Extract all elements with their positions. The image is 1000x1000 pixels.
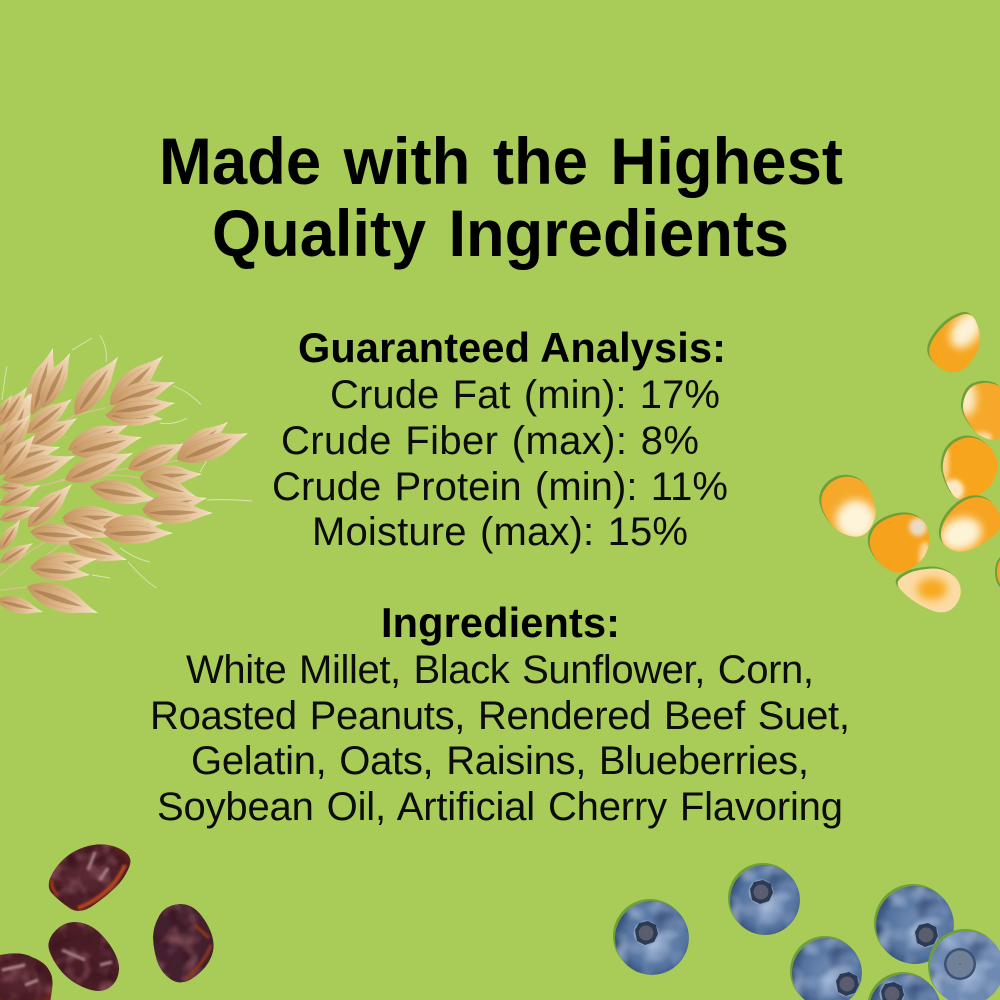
blueberry 2 xyxy=(728,863,800,935)
corn kernel 4 xyxy=(938,495,1000,552)
blueberry 6 xyxy=(928,929,1000,1000)
text block: ingredients: White Millet, Black Sunflower, Corn, xyxy=(186,648,814,692)
raisin 1 xyxy=(49,844,131,911)
illustration: corn kernels xyxy=(819,306,1000,612)
heading: ingredients: Ingredients: xyxy=(381,599,620,646)
corn kernel 3 xyxy=(941,435,998,501)
heading: guaranteed analysis: Guaranteed Analysis: xyxy=(298,324,726,371)
text block: ingredients: Roasted Peanuts, Rendered Beef Suet, xyxy=(150,694,850,738)
text block: guaranteed analysis: Crude Fiber (max): 8% xyxy=(281,419,699,463)
text block: ingredients xyxy=(150,599,850,829)
text block: guaranteed analysis: Crude Protein (min): 11% xyxy=(272,465,728,509)
title xyxy=(159,124,843,270)
corn kernel 5 xyxy=(819,475,876,540)
corn kernel 8 xyxy=(995,556,1000,588)
illustration: oat sprig xyxy=(0,335,252,624)
title: Quality Ingredients xyxy=(212,196,789,270)
raisin 4 xyxy=(0,953,53,1000)
text block: guaranteed analysis xyxy=(272,324,728,554)
text block: guaranteed analysis: Crude Fat (min): 17% xyxy=(330,373,720,417)
corn kernel 1 xyxy=(927,312,980,372)
corn kernel 7 xyxy=(896,566,961,612)
text block: ingredients: Soybean Oil, Artificial Cherry Flavoring xyxy=(157,785,843,829)
illustration: blueberries xyxy=(613,863,1000,1000)
illustration: raisins xyxy=(0,844,214,1000)
title: Made with the Highest xyxy=(159,124,843,198)
blueberry 5 xyxy=(867,972,941,1000)
corn kernel 6 xyxy=(868,512,931,573)
blueberry 4 xyxy=(790,936,862,1000)
blueberry 1 xyxy=(613,899,689,975)
corn kernel 2 xyxy=(961,380,1000,440)
blueberry 3 xyxy=(874,884,954,964)
raisin 2 xyxy=(48,922,119,991)
text block: guaranteed analysis: Moisture (max): 15% xyxy=(312,510,688,554)
raisin 3 xyxy=(153,904,214,983)
text block: ingredients: Gelatin, Oats, Raisins, Blueberries, xyxy=(191,739,809,783)
